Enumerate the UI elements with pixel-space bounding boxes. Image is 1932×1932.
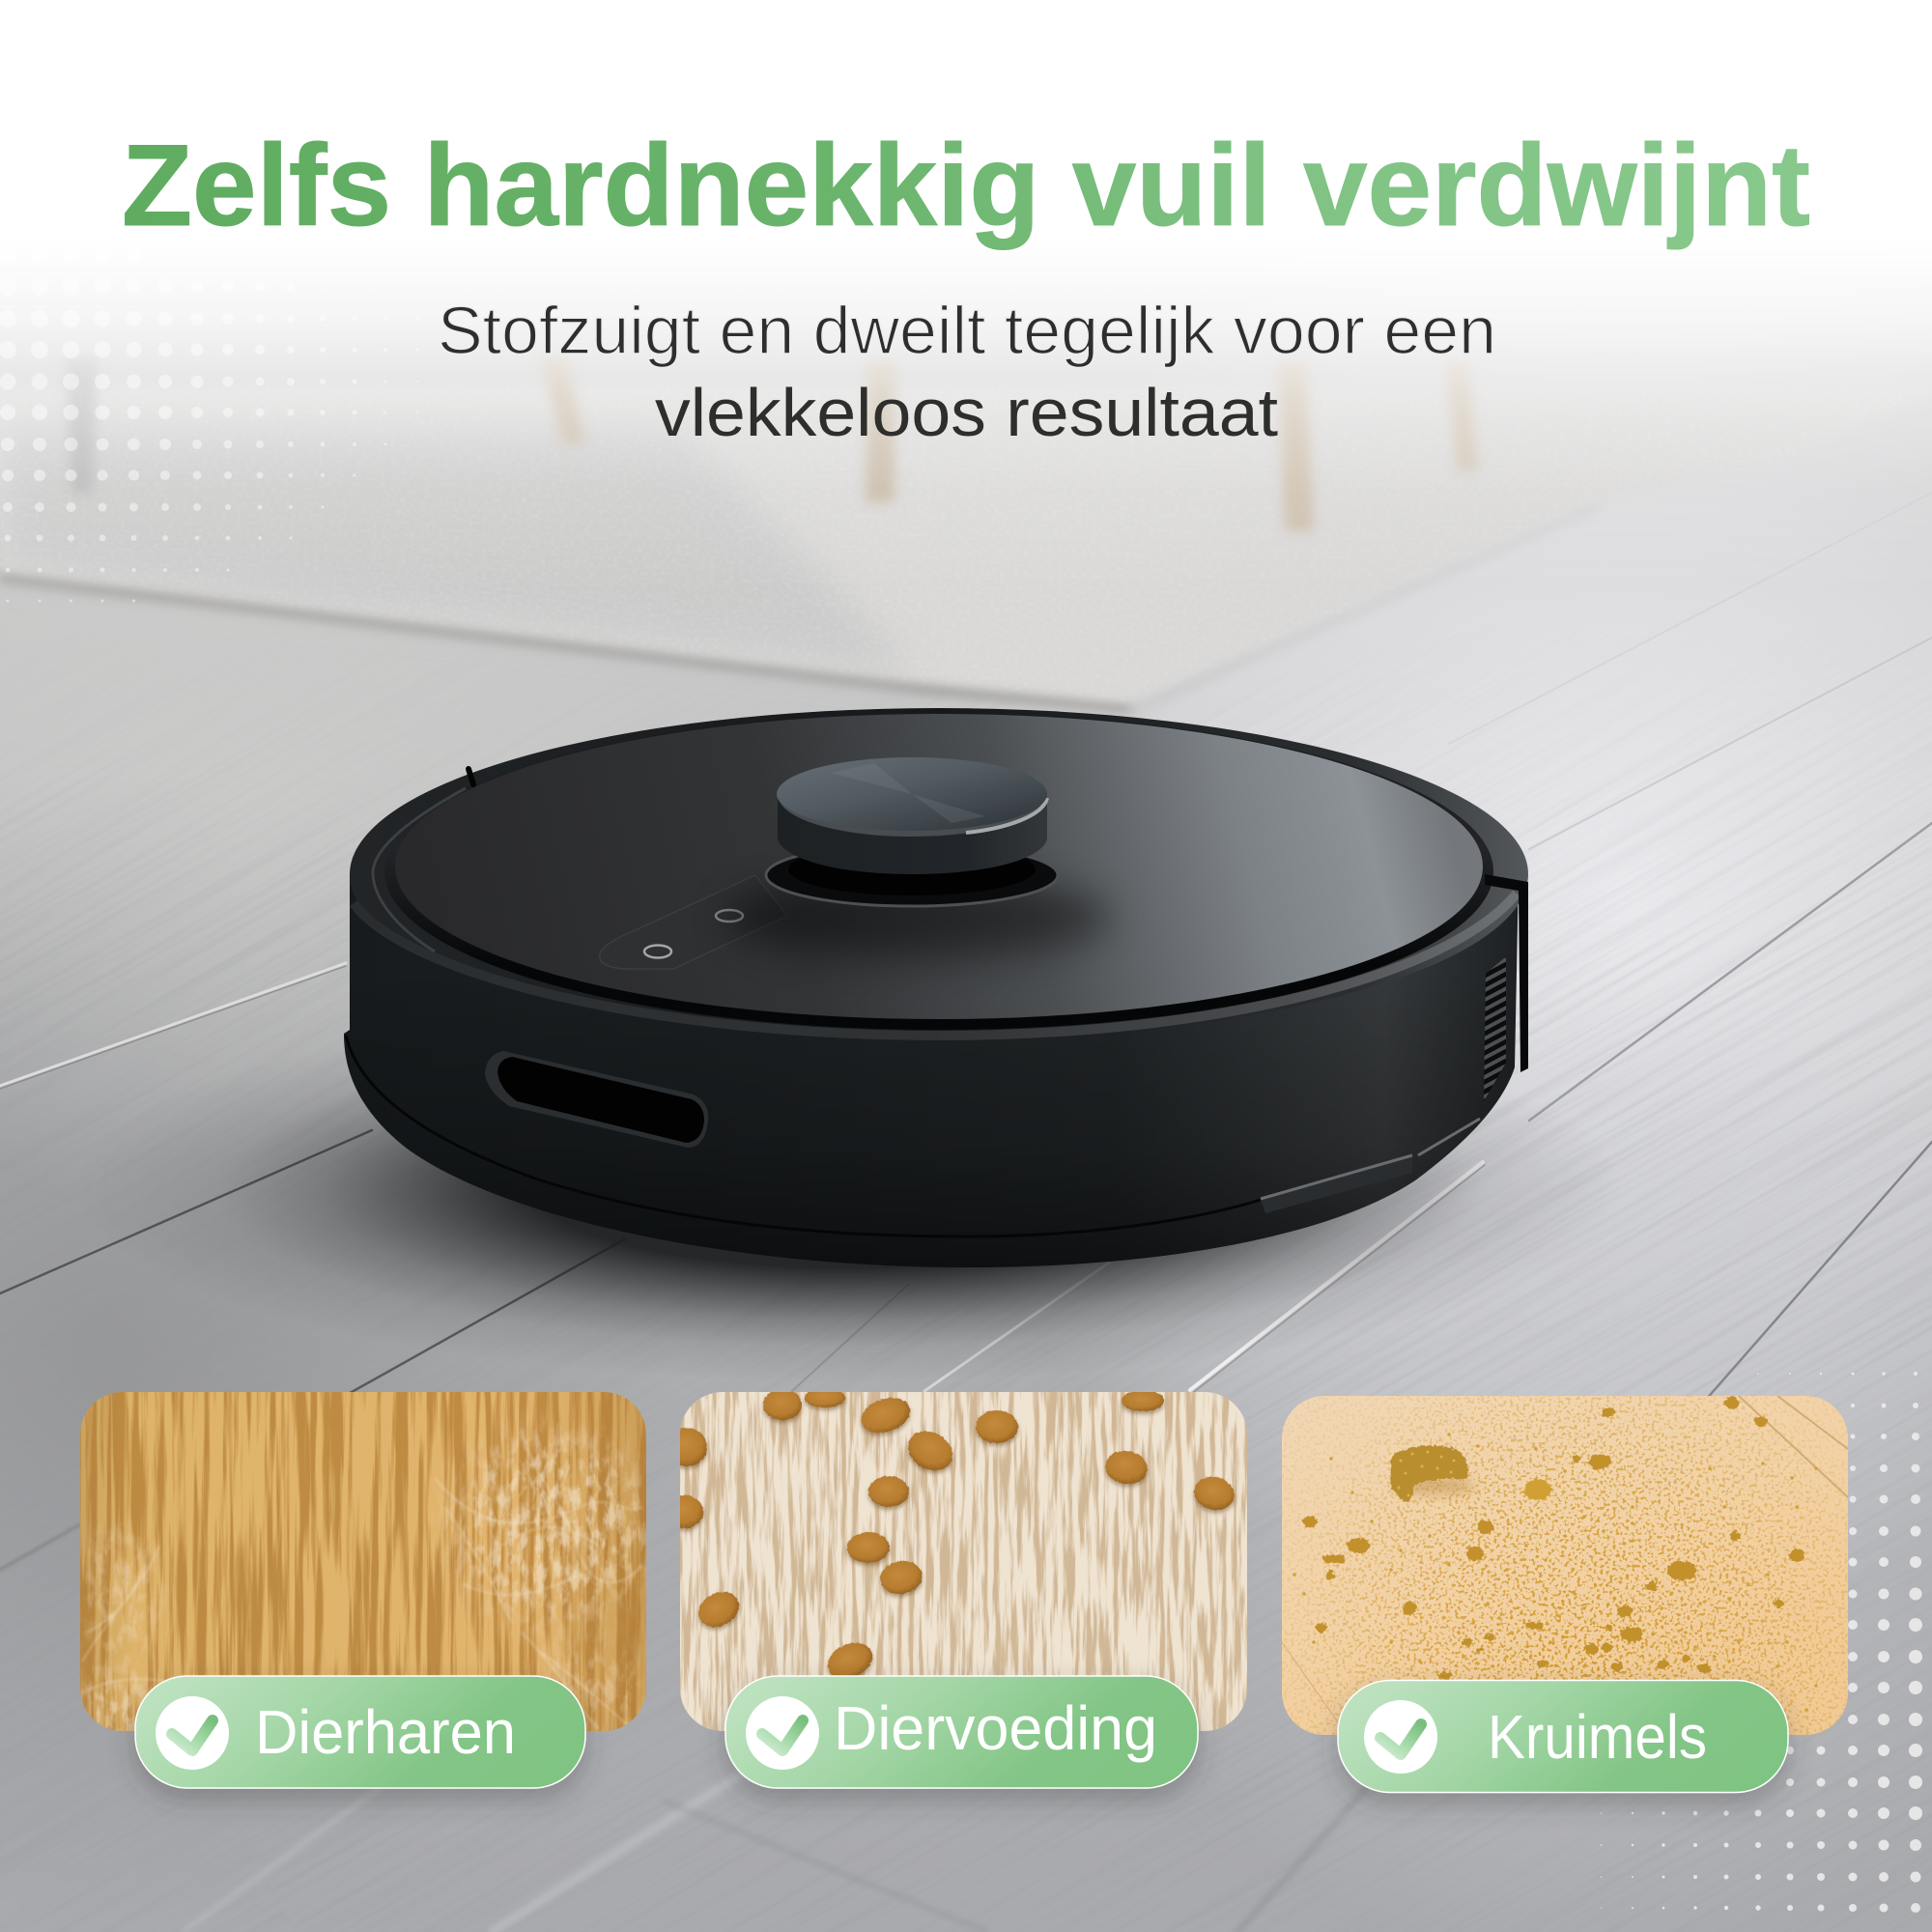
label text: Dierharen [255, 1697, 516, 1767]
rim left lip highlight [373, 788, 466, 952]
sensor neck [788, 843, 1036, 895]
button panel [600, 875, 787, 969]
label pill [135, 1676, 585, 1788]
rim gap right and side strip [1485, 874, 1528, 1072]
label pill [1338, 1681, 1788, 1793]
groove around top disc [384, 713, 1493, 1030]
rim [350, 708, 1528, 1040]
decorative halftone dots, top left [0, 247, 419, 603]
icon: check [156, 1696, 229, 1770]
robot body [344, 874, 1519, 1267]
sensor ring [766, 844, 1058, 906]
sensor cap chamfer [778, 794, 1047, 837]
photo: floor with crumbs [1282, 1396, 1848, 1735]
panel: Kruimels [1282, 1396, 1848, 1793]
icon: check [1364, 1700, 1437, 1774]
panel: Dierharen [80, 1392, 646, 1788]
sensor brushed light [831, 763, 985, 823]
photo: wood with kibble [667, 1388, 1247, 1731]
icon: check [746, 1696, 819, 1770]
bumper highlight line [1261, 1119, 1480, 1199]
sensor tower [778, 794, 1047, 874]
rim notch left [469, 769, 473, 784]
side slot [485, 1051, 708, 1148]
sensor top [777, 757, 1047, 831]
button 1 [644, 945, 671, 958]
sensor cap highlight [966, 798, 1047, 833]
rim front band [354, 894, 1517, 1036]
sensor shadow on disc [724, 877, 1111, 958]
decorative halftone dots, bottom right [1601, 1372, 1922, 1913]
subheading: Stofzuigt en dweilt tegelijk voor een [438, 293, 1496, 368]
top disc [395, 714, 1483, 1019]
photo: wood with pet hair [80, 1392, 646, 1731]
label pill [725, 1676, 1198, 1788]
heading: Zelfs hardnekkig vuil verdwijnt [122, 121, 1810, 250]
subheading [438, 293, 1496, 450]
button 2 [716, 910, 743, 922]
subheading: vlekkeloos resultaat [655, 375, 1278, 450]
label text: Kruimels [1488, 1702, 1707, 1772]
robot vacuum [344, 708, 1528, 1267]
vents [1484, 956, 1506, 1101]
robot floor shadow [77, 995, 1623, 1381]
panel: Diervoeding [667, 1388, 1247, 1788]
label text: Diervoeding [834, 1693, 1157, 1763]
base seam [346, 1036, 1261, 1236]
body lower shading [344, 966, 1517, 1267]
bumper strip [1261, 1154, 1412, 1213]
